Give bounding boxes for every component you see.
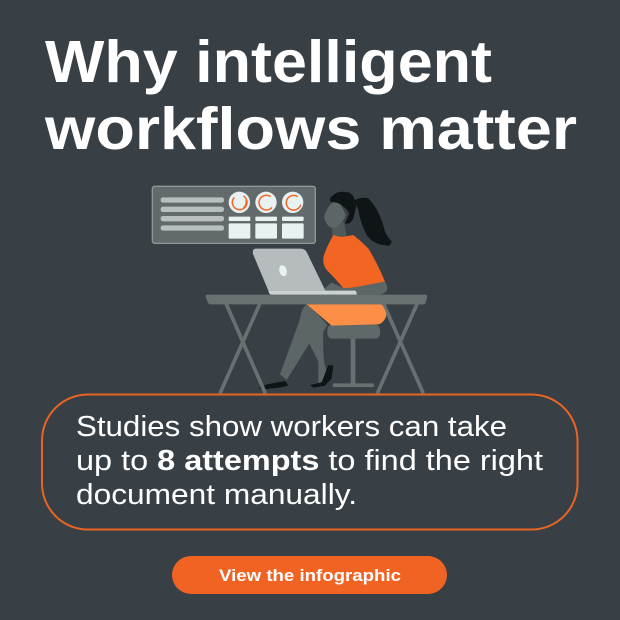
callout text: up to 8 attempts to find the right — [76, 445, 543, 477]
button: view the infographic: View the infographic — [219, 566, 401, 585]
callout text — [76, 411, 543, 511]
title: workflows matter — [44, 96, 577, 162]
face — [324, 202, 346, 228]
button: view the infographic — [172, 556, 447, 594]
callout text: document manually. — [76, 479, 357, 511]
title — [44, 29, 577, 162]
callout box — [42, 394, 578, 530]
legs — [280, 304, 328, 383]
callout text: Studies show workers can take — [76, 411, 507, 443]
skirt — [307, 304, 386, 326]
shoes — [258, 365, 333, 389]
laptop — [253, 249, 357, 295]
ponytail hair — [330, 192, 392, 246]
desk — [206, 295, 427, 393]
orange shirt — [323, 235, 385, 288]
forearm — [325, 282, 387, 295]
floating dashboard panel — [152, 186, 315, 243]
title: Why intelligent — [45, 29, 492, 95]
stool — [327, 325, 380, 387]
neck — [332, 222, 347, 237]
illustration: woman working at a desk — [152, 186, 427, 393]
